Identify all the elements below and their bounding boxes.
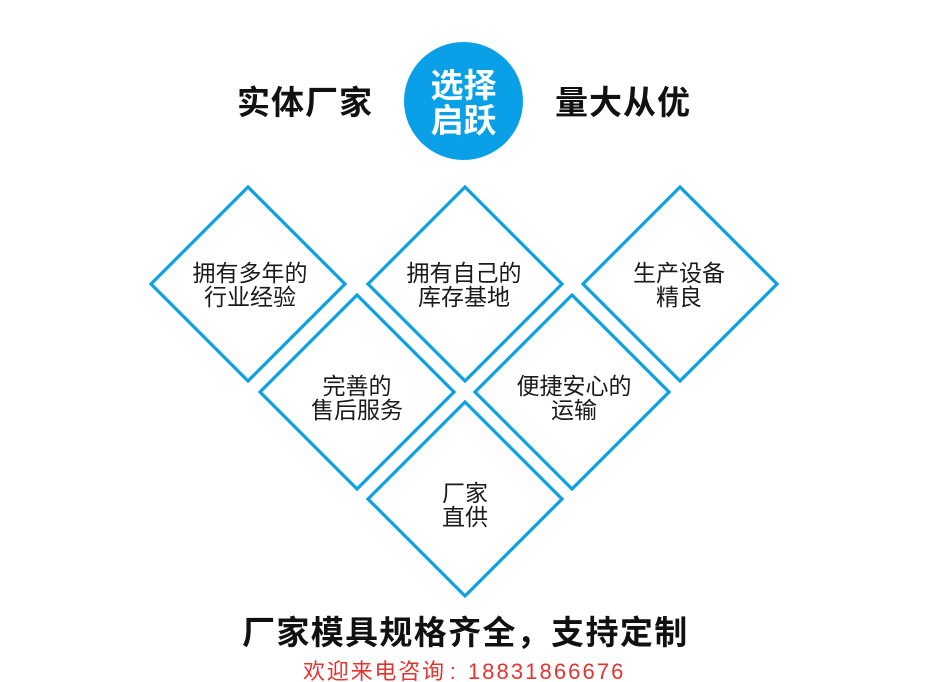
- diamond text: after-sales: 售后服务: [311, 397, 403, 423]
- diamond text: equipment: 精良: [656, 284, 702, 310]
- diamond text: direct supply: 直供: [442, 504, 488, 530]
- diamond text: equipment: [633, 260, 725, 310]
- heading: left slogan: 实体厂家: [237, 84, 373, 121]
- badge: blue circle title: [404, 42, 523, 160]
- diamond text: shipping: 运输: [551, 397, 597, 423]
- diamond text: equipment: 生产设备: [633, 260, 725, 286]
- badge: blue circle title: 启跃: [430, 102, 496, 139]
- diamond text: experience: 行业经验: [204, 284, 296, 310]
- diamond text: warehouse: 库存基地: [418, 284, 510, 310]
- diamond text: shipping: [516, 373, 632, 423]
- badge: blue circle title: 选择: [430, 67, 496, 104]
- footer heading: 厂家模具规格齐全，支持定制: [242, 614, 689, 651]
- heading: right slogan: 量大从优: [555, 84, 691, 121]
- diamond text: direct supply: 厂家: [442, 480, 488, 506]
- diamond text: experience: 拥有多年的: [192, 260, 308, 286]
- diamond text: warehouse: [406, 260, 522, 310]
- diamond text: experience: [192, 260, 308, 310]
- diamond text: warehouse: 拥有自己的: [406, 260, 522, 286]
- diamond text: direct supply: [442, 480, 488, 530]
- diamond text: shipping: 便捷安心的: [516, 373, 632, 399]
- diamond text: after-sales: [311, 373, 403, 423]
- diamond text: after-sales: 完善的: [322, 373, 392, 399]
